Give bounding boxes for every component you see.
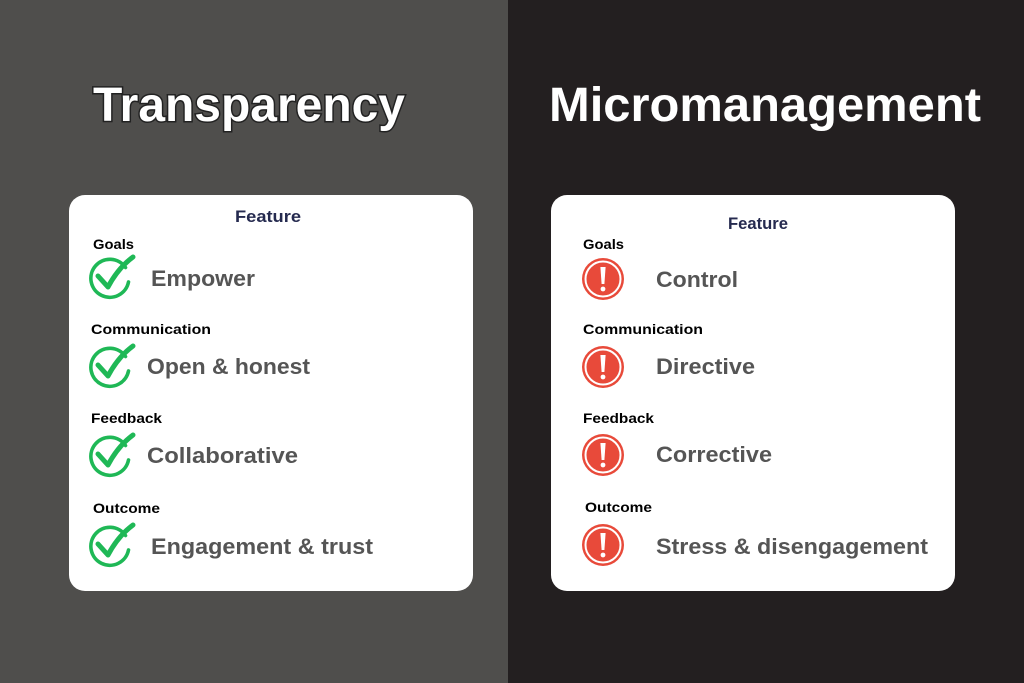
row: outcome: Stress & disengagement: [656, 534, 929, 559]
row: communication: Directive: [656, 354, 755, 379]
row: outcome: [91, 500, 374, 565]
row: communication: Communication: [583, 321, 703, 337]
panel: micromanagement: [551, 195, 955, 591]
row: communication: [91, 321, 311, 386]
title: Transparency: Transparency: [93, 79, 405, 132]
row: feedback: [582, 410, 772, 476]
row: feedback: [91, 410, 298, 475]
heading: feature: Feature: [728, 214, 788, 233]
row: goals: Goals: [583, 236, 624, 252]
title: Micromanagement: Micromanagement: [549, 79, 981, 132]
row: goals: Empower: [151, 266, 255, 291]
row: feedback: Feedback: [583, 410, 654, 426]
row: outcome: Engagement & trust: [151, 534, 374, 559]
row: communication: [582, 321, 755, 388]
row: goals: [582, 236, 738, 300]
left background: [0, 0, 508, 683]
row: feedback: Corrective: [656, 442, 772, 467]
panel: transparency: [69, 195, 473, 591]
row: goals: Control: [656, 267, 738, 292]
row: outcome: [582, 499, 929, 566]
row: outcome: Outcome: [585, 499, 652, 515]
row: feedback: Collaborative: [147, 443, 298, 468]
row: goals: [91, 236, 255, 297]
row: outcome: Outcome: [93, 500, 160, 516]
row: feedback: Feedback: [91, 410, 162, 426]
heading: feature: Feature: [235, 207, 301, 226]
right background: [508, 0, 1024, 683]
row: communication: Open & honest: [147, 354, 311, 379]
row: communication: Communication: [91, 321, 211, 337]
row: goals: Goals: [93, 236, 134, 252]
